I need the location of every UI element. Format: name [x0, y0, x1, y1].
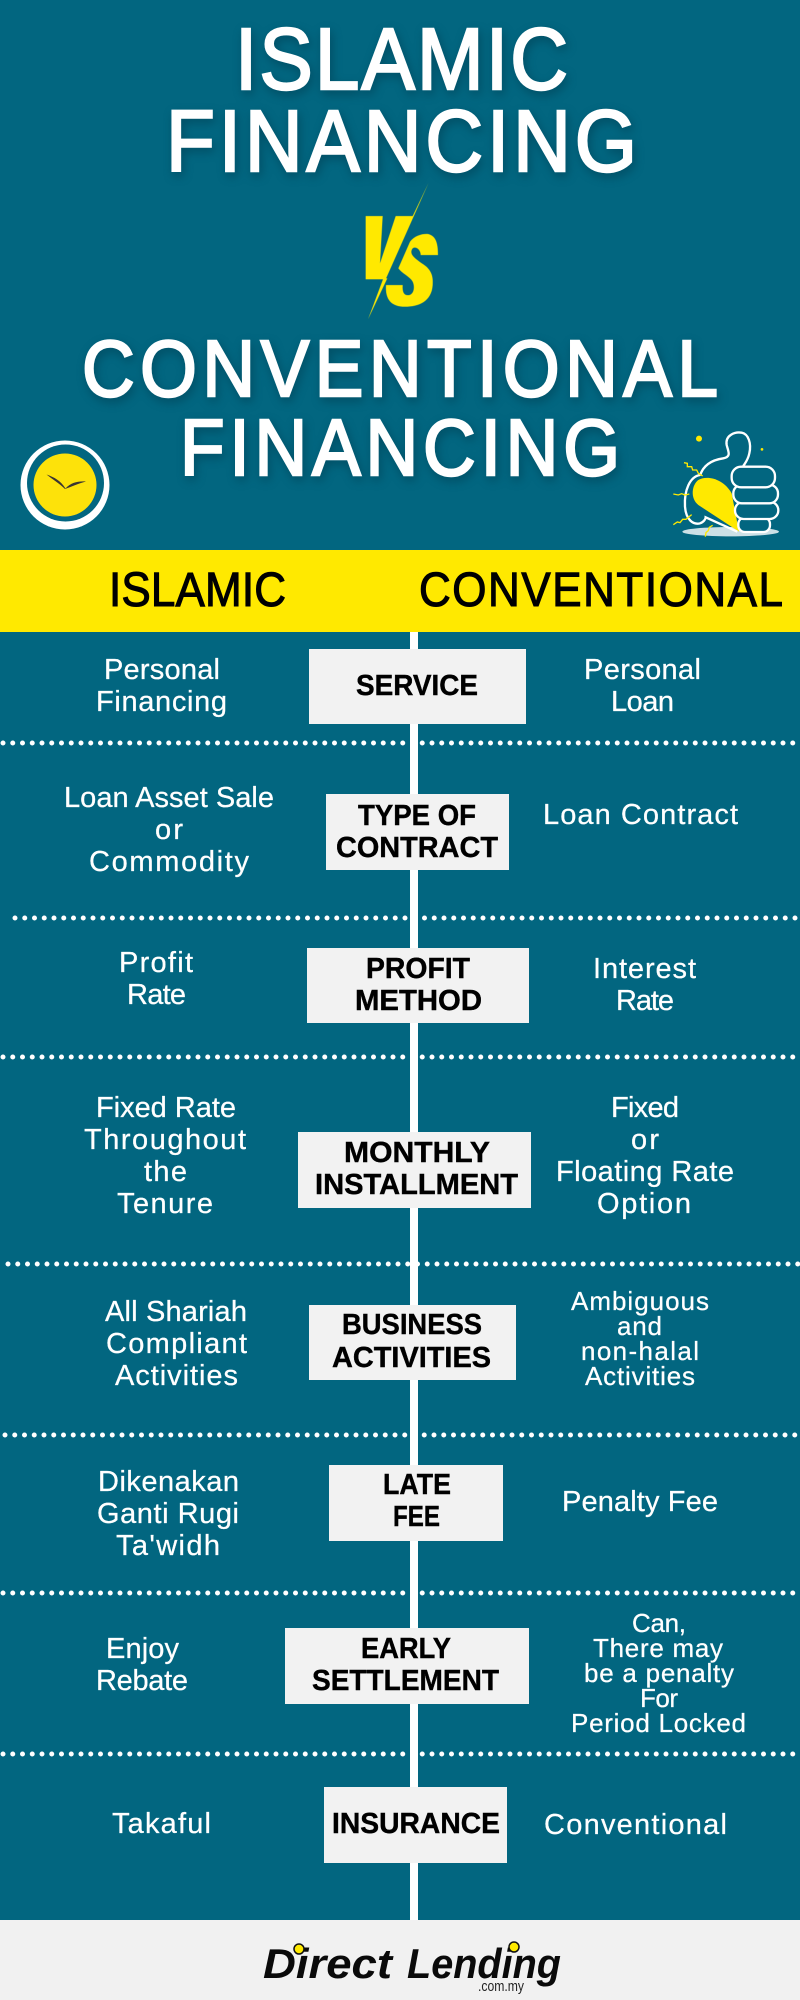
- panel: insurance row: [112, 1787, 727, 1863]
- Islamic value: Dikenakan: [98, 1466, 239, 1498]
- panel: business activities row: [105, 1286, 709, 1392]
- conventional value: Penalty Fee: [562, 1486, 718, 1518]
- column heading: Islamic: ISLAMIC: [109, 562, 286, 616]
- conventional value: Activities: [585, 1361, 695, 1391]
- panel: type of contract row: [64, 782, 738, 878]
- Islamic value: Throughout: [84, 1124, 246, 1156]
- category box: insurance: INSURANCE: [332, 1808, 500, 1840]
- title: CONVENTIONAL: [82, 325, 718, 414]
- conventional value: There may: [593, 1633, 723, 1663]
- title: FINANCING: [180, 404, 620, 493]
- title: ISLAMIC: [235, 10, 568, 108]
- conventional value: Can,: [632, 1608, 686, 1638]
- Islamic value: Profit: [119, 947, 193, 979]
- category box: profit method: PROFIT: [366, 953, 470, 985]
- category box: business activities: [309, 1305, 516, 1380]
- category box: type of contract: TYPE OF: [358, 800, 476, 832]
- Islamic value: Fixed Rate: [96, 1092, 236, 1124]
- Islamic value: Activities: [115, 1360, 238, 1392]
- category box: profit method: METHOD: [355, 985, 482, 1017]
- Islamic value: Rate: [127, 979, 186, 1011]
- Islamic value: [105, 1296, 247, 1392]
- Islamic value: Commodity: [89, 846, 250, 878]
- panel: profit method row: [119, 947, 696, 1023]
- conventional value: [571, 1286, 709, 1391]
- conventional value: [593, 953, 696, 1017]
- category box: late fee: [329, 1465, 503, 1541]
- conventional value: Ambiguous: [571, 1286, 709, 1316]
- Islamic value: [97, 1466, 239, 1562]
- column heading: Conventional: CONVENTIONAL: [419, 562, 783, 616]
- category box: business activities: ACTIVITIES: [332, 1342, 491, 1374]
- conventional value: Loan Contract: [543, 799, 738, 831]
- conventional value: [571, 1608, 746, 1738]
- Islamic value: or: [155, 814, 183, 846]
- conventional value: Option: [597, 1188, 691, 1220]
- header band: [0, 550, 800, 632]
- logo: Direct Lending: [263, 1940, 561, 1995]
- category box: early settlement: SETTLEMENT: [312, 1665, 499, 1697]
- Islamic value: Takaful: [112, 1808, 211, 1840]
- panel: late fee row: [97, 1465, 718, 1562]
- category box: service: SERVICE: [356, 670, 478, 702]
- conventional value: For: [640, 1683, 678, 1713]
- conventional value: Fixed: [611, 1092, 679, 1124]
- Islamic value: Personal: [104, 654, 220, 686]
- panel: service row: [96, 649, 701, 724]
- Islamic value: Compliant: [106, 1328, 247, 1360]
- Islamic value: Tenure: [117, 1188, 213, 1220]
- title: [82, 10, 718, 493]
- icon: thumbs up: [673, 432, 779, 537]
- conventional value: non-halal: [581, 1336, 699, 1366]
- category box: monthly installment: MONTHLY: [344, 1137, 490, 1169]
- conventional value: Rate: [616, 985, 674, 1017]
- logo: Direct Lending: Direct: [263, 1940, 394, 1987]
- conventional value: Floating Rate: [556, 1156, 734, 1188]
- Islamic value: [84, 1092, 246, 1220]
- Islamic value: [119, 947, 193, 1011]
- conventional value: or: [631, 1124, 659, 1156]
- logo: Direct Lending: .com.my: [478, 1978, 524, 1995]
- category box: service: [309, 649, 526, 724]
- Islamic value: Ganti Rugi: [97, 1498, 239, 1530]
- Islamic value: Financing: [96, 686, 227, 718]
- Islamic value: [64, 782, 274, 878]
- Islamic value: Enjoy: [106, 1633, 180, 1665]
- icon: clock: [20, 440, 110, 530]
- category box: late fee: LATE: [383, 1469, 451, 1501]
- category box: insurance: [324, 1787, 507, 1863]
- conventional value: [584, 654, 701, 718]
- conventional value: [556, 1092, 734, 1220]
- conventional value: Period Locked: [571, 1708, 746, 1738]
- Islamic value: Ta'widh: [116, 1530, 220, 1562]
- conventional value: Conventional: [544, 1809, 727, 1841]
- Islamic value: All Shariah: [105, 1296, 247, 1328]
- panel: monthly installment row: [84, 1092, 734, 1220]
- category box: type of contract: CONTRACT: [336, 832, 498, 864]
- conventional value: Personal: [584, 654, 701, 686]
- category box: profit method: [307, 948, 529, 1023]
- icon: VS lightning emblem: [366, 183, 438, 319]
- Islamic value: [96, 654, 227, 718]
- footer: [0, 1920, 800, 2000]
- category box: late fee: FEE: [393, 1501, 440, 1533]
- conventional value: Loan: [611, 686, 674, 718]
- conventional value: be a penalty: [584, 1658, 734, 1688]
- title: FINANCING: [166, 92, 637, 190]
- category box: type of contract: [326, 794, 509, 870]
- category box: business activities: BUSINESS: [342, 1309, 482, 1341]
- conventional value: Interest: [593, 953, 696, 985]
- panel: early settlement row: [96, 1608, 746, 1738]
- category box: monthly installment: INSTALLMENT: [315, 1169, 518, 1201]
- category box: monthly installment: [298, 1132, 531, 1208]
- logo: Direct Lending: Lending: [407, 1940, 561, 1987]
- category box: early settlement: EARLY: [361, 1633, 451, 1665]
- Islamic value: Loan Asset Sale: [64, 782, 274, 814]
- Islamic value: the: [144, 1156, 187, 1188]
- Islamic value: [96, 1633, 188, 1697]
- conventional value: and: [617, 1311, 662, 1341]
- category box: early settlement: [285, 1628, 529, 1704]
- Islamic value: Rebate: [96, 1665, 188, 1697]
